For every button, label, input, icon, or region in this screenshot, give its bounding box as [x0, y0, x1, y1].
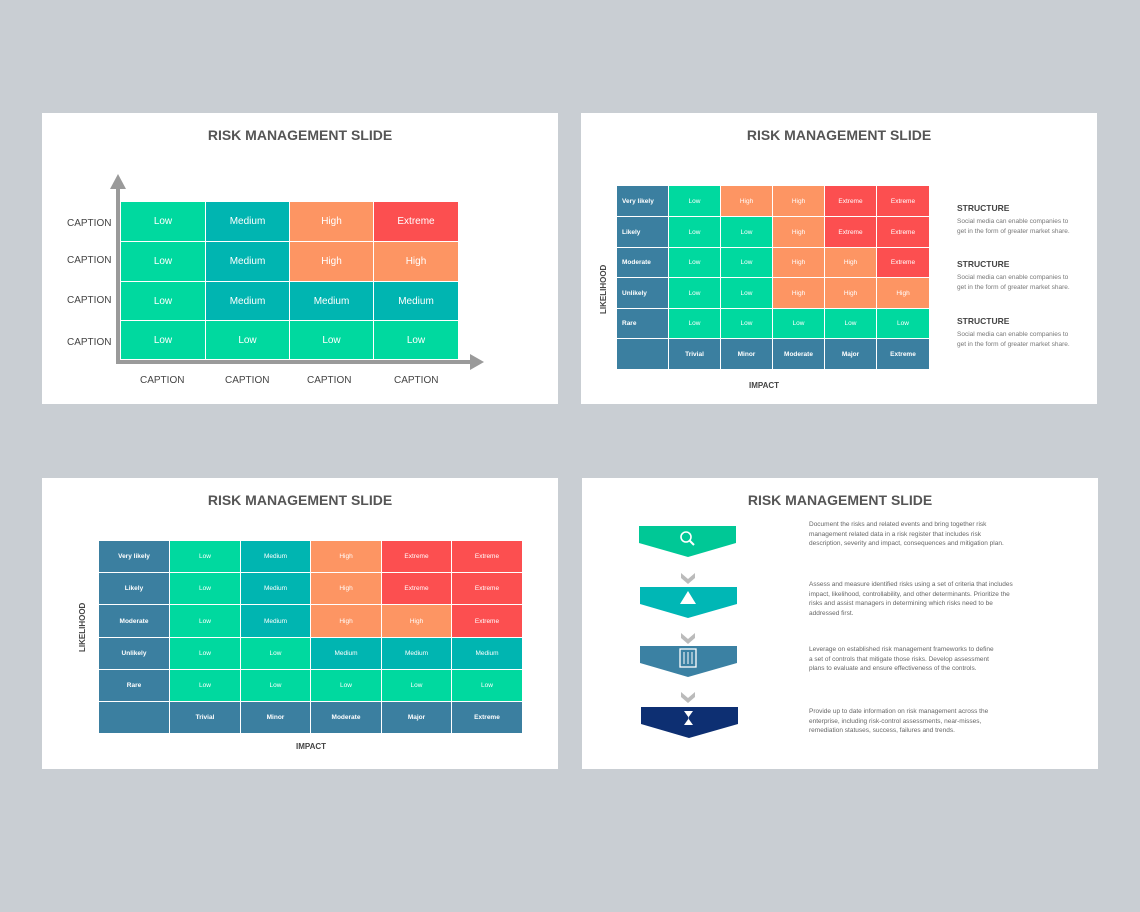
matrix grid: Low — [154, 334, 172, 346]
structure notes — [957, 203, 1070, 348]
matrix grid: Medium — [264, 618, 287, 624]
column captions: CAPTION — [394, 375, 438, 386]
matrix grid: Medium — [314, 296, 349, 306]
matrix grid — [99, 541, 522, 733]
matrix grid: Medium — [398, 296, 434, 306]
matrix grid: Medium — [230, 216, 265, 227]
panel: slide 4 process steps — [582, 478, 1098, 769]
row captions: CAPTION — [67, 255, 111, 266]
matrix grid: Low — [154, 296, 172, 306]
heading: RISK MANAGEMENT SLIDE — [208, 492, 392, 508]
matrix grid: Extreme — [397, 216, 435, 227]
matrix grid: Major — [408, 714, 425, 721]
matrix grid: Low — [689, 228, 700, 236]
matrix grid: Extreme — [891, 259, 915, 266]
matrix grid: Low — [154, 256, 172, 267]
matrix grid: Extreme — [475, 553, 499, 560]
matrix grid: Moderate — [622, 259, 651, 266]
matrix grid: Low — [407, 334, 425, 346]
matrix grid: Low — [793, 320, 804, 327]
structure notes: STRUCTURE — [957, 203, 1009, 213]
matrix grid: Moderate — [784, 350, 813, 358]
matrix grid: High — [321, 216, 342, 227]
matrix grid: Low — [741, 290, 752, 296]
structure notes: STRUCTURE — [957, 259, 1009, 269]
matrix grid: Medium — [264, 585, 287, 592]
matrix grid: High — [896, 290, 910, 296]
matrix grid: High — [844, 259, 857, 266]
axis label: likelihood: LIKELIHOOD — [599, 265, 608, 314]
matrix grid: Unlikely — [122, 650, 146, 657]
matrix grid: Low — [199, 650, 211, 657]
matrix grid: Low — [199, 682, 211, 689]
matrix grid: High — [410, 618, 423, 624]
matrix grid: Low — [199, 618, 211, 624]
matrix grid: High — [321, 256, 342, 267]
axis label: impact: IMPACT — [296, 742, 326, 751]
matrix grid: High — [339, 618, 353, 624]
matrix grid: Medium — [230, 256, 265, 267]
matrix grid: Rare — [127, 682, 141, 689]
matrix grid: Extreme — [475, 585, 499, 592]
matrix grid: Low — [199, 585, 211, 592]
matrix grid: Medium — [475, 650, 499, 657]
matrix grid: Low — [689, 320, 700, 327]
matrix grid: Likely — [622, 228, 640, 236]
matrix grid: High — [406, 256, 426, 267]
row captions: CAPTION — [67, 295, 111, 306]
matrix grid: Low — [741, 228, 752, 236]
heading: RISK MANAGEMENT SLIDE — [747, 127, 931, 143]
matrix grid — [617, 186, 929, 369]
matrix grid: Medium — [230, 296, 265, 306]
row captions: CAPTION — [67, 218, 111, 229]
matrix grid: Low — [689, 259, 700, 266]
matrix grid: High — [740, 198, 753, 204]
matrix grid: Major — [842, 350, 859, 358]
matrix grid: Minor — [738, 350, 755, 358]
matrix grid: Low — [270, 650, 281, 657]
structure notes: STRUCTURE — [957, 316, 1009, 326]
matrix grid: High — [792, 198, 805, 204]
matrix grid: Low — [897, 320, 909, 327]
column captions: CAPTION — [140, 375, 184, 386]
structure notes: Social media can enable companies to get in the form of greater market share. — [957, 218, 1070, 235]
matrix grid: Low — [741, 259, 752, 266]
matrix grid: Minor — [267, 714, 284, 721]
matrix grid: Extreme — [891, 198, 915, 204]
matrix grid: Unlikely — [622, 290, 647, 296]
row captions — [67, 218, 111, 348]
matrix grid: Medium — [405, 650, 428, 657]
matrix grid: Low — [340, 682, 352, 689]
matrix grid: Low — [411, 682, 422, 689]
row captions: CAPTION — [67, 337, 111, 348]
matrix grid: Extreme — [890, 350, 916, 358]
matrix grid: Extreme — [404, 553, 429, 560]
matrix grid: High — [844, 290, 857, 296]
matrix grid: Extreme — [838, 228, 863, 236]
matrix grid: Low — [481, 682, 493, 689]
matrix grid: Medium — [264, 553, 287, 560]
heading: RISK MANAGEMENT SLIDE — [748, 492, 932, 508]
matrix grid: High — [339, 585, 353, 592]
process chevrons and icons — [639, 526, 738, 738]
matrix grid: Low — [154, 216, 172, 227]
matrix grid: Low — [845, 320, 856, 327]
column captions: CAPTION — [307, 375, 351, 386]
matrix grid: Extreme — [891, 228, 915, 236]
axis label: impact: IMPACT — [749, 381, 779, 390]
matrix grid: High — [792, 290, 805, 296]
matrix grid: Low — [689, 198, 700, 204]
step descriptions: Leverage on established risk management frameworks to define a set of controls that mitigate those risks. Develop assessment plans to evaluate and ensure effectiveness of the controls. — [809, 646, 994, 672]
matrix grid: Low — [741, 320, 752, 327]
matrix grid: Low — [199, 553, 211, 560]
matrix grid: Trivial — [685, 350, 704, 358]
matrix grid: Likely — [125, 585, 143, 592]
structure notes: Social media can enable companies to get in the form of greater market share. — [957, 274, 1070, 291]
step descriptions: Assess and measure identified risks using a set of criteria that includes impact, likelihood, controllability, and other determinants. Prioritize the risks and assist managers in determining which risks need to be addressed first. — [809, 581, 1013, 616]
matrix grid: Very likely — [118, 553, 150, 560]
matrix grid: Medium — [334, 650, 358, 657]
matrix grid: High — [339, 553, 353, 560]
step descriptions: Provide up to date information on risk management across the enterprise, including risk-control assessments, near-misses, remediation statuses, success, failures and trends. — [809, 708, 988, 734]
matrix grid: Extreme — [838, 198, 863, 204]
panel: slide 1 risk matrix with axes — [42, 113, 558, 404]
matrix grid: Trivial — [196, 714, 214, 721]
matrix grid: Low — [322, 334, 341, 346]
axes arrows — [110, 174, 484, 370]
structure notes: Social media can enable companies to get in the form of greater market share. — [957, 331, 1070, 348]
matrix grid — [121, 202, 458, 359]
matrix grid: Rare — [622, 320, 636, 327]
heading: RISK MANAGEMENT SLIDE — [208, 127, 392, 143]
matrix grid: Low — [270, 682, 281, 689]
column captions: CAPTION — [225, 375, 269, 386]
matrix grid: Low — [689, 290, 700, 296]
panel: slide 3 large likelihood-impact matrix — [42, 478, 558, 769]
matrix grid: Extreme — [404, 585, 429, 592]
step descriptions — [809, 521, 1013, 734]
matrix grid: Moderate — [332, 714, 360, 721]
matrix grid: High — [792, 228, 805, 236]
matrix grid: Extreme — [474, 714, 500, 721]
column captions — [140, 375, 438, 386]
matrix grid: Low — [238, 334, 257, 346]
matrix grid: Extreme — [475, 618, 499, 624]
step descriptions: Document the risks and related events and bring together risk management related data in a risk register that includes risk description, severity and impact, consequences and mitigation plan. — [809, 521, 1004, 547]
panel: slide 2 likelihood-impact matrix with structure notes — [581, 113, 1097, 404]
axis label: likelihood: LIKELIHOOD — [78, 603, 87, 652]
matrix grid: Moderate — [120, 618, 148, 624]
matrix grid: High — [792, 259, 805, 266]
matrix grid: Very likely — [622, 198, 654, 204]
